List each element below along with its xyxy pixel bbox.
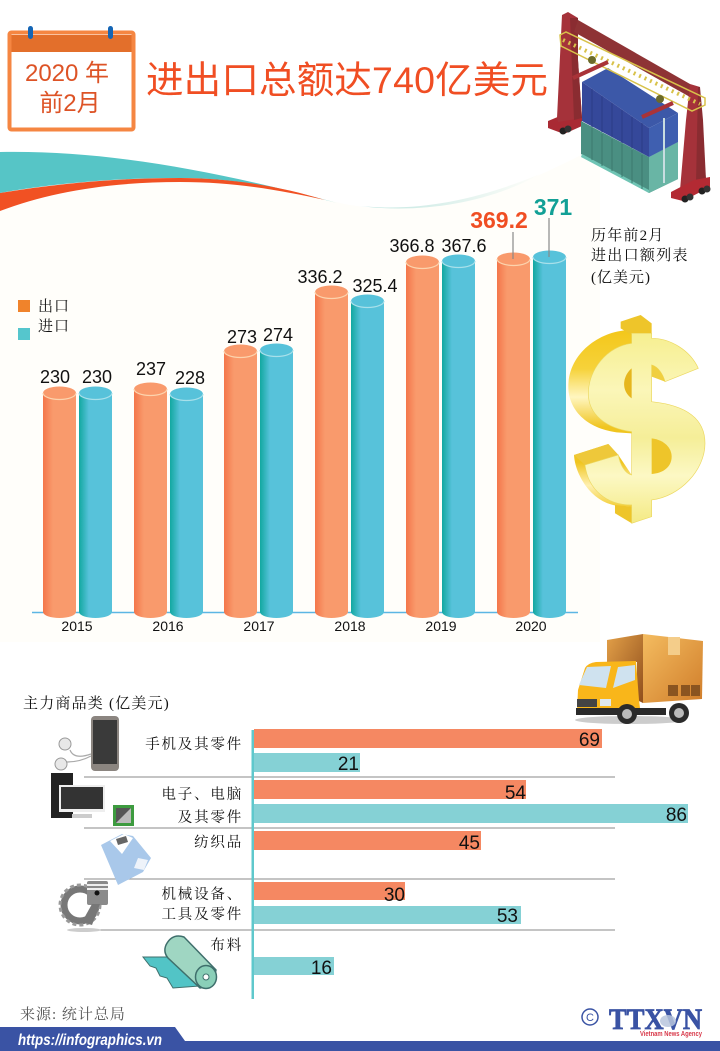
icon: gear and piston — [60, 881, 108, 932]
title: 进出口总额达740亿美元 — [146, 59, 548, 101]
2015 columns: 230 — [82, 367, 112, 387]
row: phones: 69 — [579, 730, 600, 751]
2019 columns: 367.6 — [441, 236, 487, 256]
2017 columns: 273 — [227, 327, 257, 347]
2020 columns: 369.2 — [470, 207, 528, 233]
row: phones: 21 — [338, 754, 359, 775]
2020 columns: 2020 — [515, 618, 547, 634]
row: machinery: 机械设备、 — [162, 885, 243, 903]
icon: gantry crane with containers — [548, 12, 710, 202]
2016 columns: 2016 — [152, 618, 184, 634]
logo: TTXVN — [582, 1003, 702, 1038]
bar chart: commodities — [145, 729, 688, 999]
footer band — [0, 1027, 720, 1051]
row: electronics — [162, 780, 688, 826]
2019 columns: 366.8 — [389, 236, 435, 256]
calendar badge — [10, 26, 134, 130]
chart caption — [591, 226, 689, 286]
row: machinery — [162, 882, 521, 927]
row: textiles: 45 — [459, 833, 480, 854]
row: electronics: 电子、电脑 — [162, 785, 243, 803]
2020 columns: 371 — [534, 194, 572, 220]
row: fabrics: 布料 — [210, 937, 243, 954]
icon: delivery truck — [575, 634, 703, 724]
chart caption: (亿美元) — [591, 269, 651, 286]
icon: smartphone and earphones — [55, 716, 119, 771]
2020 columns — [470, 194, 572, 634]
2016 columns — [134, 359, 205, 634]
icon: fabric roll — [143, 936, 216, 988]
logo: TTXVN: C — [586, 1012, 594, 1024]
legend: 进口 — [38, 318, 70, 335]
row: fabrics: 16 — [311, 958, 332, 979]
legend: 出口 — [38, 298, 70, 315]
2016 columns: 237 — [136, 359, 166, 379]
2015 columns: 2015 — [61, 618, 93, 634]
row: fabrics — [210, 937, 334, 979]
2017 columns: 2017 — [243, 618, 275, 634]
row: machinery: 工具及零件 — [162, 906, 243, 923]
chart caption: 进出口额列表 — [591, 246, 689, 264]
2017 columns — [224, 325, 293, 634]
logo: TTXVN: Vietnam News Agency — [640, 1031, 702, 1038]
footer band: https://infographics.vn — [18, 1032, 162, 1049]
2016 columns: 228 — [175, 368, 205, 388]
background: cream chart area — [0, 145, 600, 642]
row: phones — [145, 729, 602, 775]
row: machinery: 30 — [384, 885, 405, 906]
2015 columns: 230 — [40, 367, 70, 387]
2018 columns — [297, 267, 398, 634]
row: textiles: 纺织品 — [194, 834, 243, 851]
row: textiles — [194, 831, 481, 854]
2018 columns: 336.2 — [297, 267, 343, 287]
dividers — [84, 777, 615, 930]
row: machinery: 53 — [497, 906, 518, 927]
heading: main commodities: 主力商品类 (亿美元) — [23, 694, 170, 712]
calendar badge: 前2月 — [39, 90, 101, 117]
icon: computer and chip — [51, 773, 134, 826]
row: electronics: 54 — [505, 783, 526, 804]
row: electronics: 86 — [666, 805, 687, 826]
chart caption: 历年前2月 — [591, 226, 665, 244]
2015 columns — [40, 367, 112, 634]
2017 columns: 274 — [263, 325, 293, 345]
logo: TTXVN: TTXVN — [609, 1003, 702, 1036]
header swoosh — [0, 152, 540, 211]
row: phones: 手机及其零件 — [145, 736, 243, 753]
calendar badge: 2020 年 — [25, 60, 109, 87]
2018 columns: 325.4 — [352, 276, 398, 296]
2019 columns — [389, 236, 487, 634]
row: electronics: 及其零件 — [178, 809, 243, 826]
bar chart: yearly import export — [32, 194, 578, 634]
2018 columns: 2018 — [334, 618, 366, 634]
2019 columns: 2019 — [425, 618, 457, 634]
icon: gold dollar sign — [568, 315, 705, 523]
icon: shirt — [101, 834, 151, 885]
legend — [18, 298, 70, 340]
source: 来源: 统计总局 — [20, 1006, 126, 1023]
